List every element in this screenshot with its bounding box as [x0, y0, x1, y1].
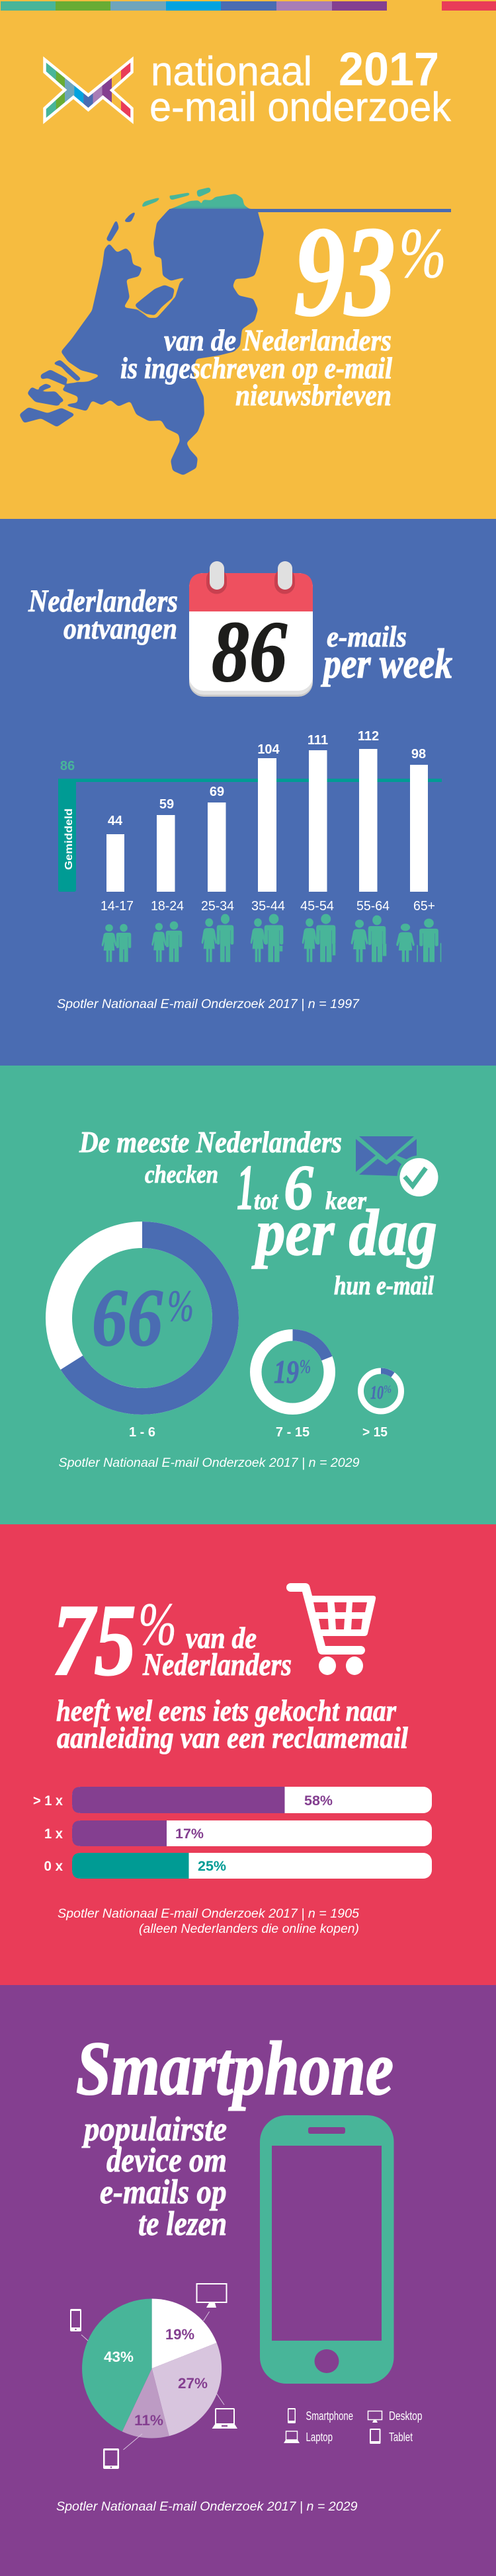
- title: [149, 44, 452, 130]
- donut chart: 66%: 66: [92, 1272, 163, 1363]
- text: subscribed to newsletters: [120, 323, 392, 412]
- pie chart: devices: 11%: [134, 2412, 163, 2429]
- icon: desktop: [197, 2284, 226, 2308]
- heading: tot: [254, 1187, 278, 1215]
- bar chart: purchases: > 1 x: [33, 1793, 63, 1809]
- source note: (alleen Nederlanders die online kopen): [139, 1922, 359, 1936]
- legend: Laptop: [306, 2431, 333, 2444]
- icon: large smartphone: [260, 2115, 394, 2384]
- icons: people by age group: [102, 914, 441, 962]
- legend: Smartphone: [306, 2409, 353, 2423]
- legend: Desktop: [389, 2409, 422, 2423]
- heading right: e-mails: [327, 621, 407, 653]
- bar chart: e-mails by age: Gemiddeld: [63, 808, 75, 870]
- text: subscribed to newsletters: van de Nederlanders: [164, 323, 392, 357]
- heading: aanleiding van een reclamemail: [57, 1721, 408, 1754]
- heading: Smartphone: [76, 2027, 393, 2111]
- donut chart: 10%: %: [384, 1383, 392, 1395]
- heading: 6: [284, 1152, 313, 1223]
- bar chart: e-mails by age: 18-24: [151, 899, 184, 914]
- bar chart: e-mails by age: 25-34: [201, 899, 234, 914]
- heading left: Nederlanders: [28, 584, 178, 619]
- icon: calendar with 86: [189, 561, 313, 700]
- text: subscribed to newsletters: is ingeschreven op e-mail: [120, 351, 392, 385]
- pie chart: devices: 27%: [178, 2375, 208, 2392]
- bar chart: e-mails by age: 35-44: [251, 899, 285, 914]
- source note: [58, 1907, 359, 1936]
- bar chart: e-mails by age: 69: [210, 785, 224, 799]
- colour strip: [1, 1, 496, 11]
- bar chart: purchases: 17%: [175, 1826, 204, 1842]
- bar chart: purchases: 0 x: [44, 1859, 63, 1874]
- bar chart: e-mails by age: 104: [257, 742, 280, 757]
- statistic: 93%: 93: [294, 200, 395, 343]
- bar chart: e-mails by age: 112: [358, 729, 379, 744]
- source note: Spotler Nationaal E-mail Onderzoek 2017 | n = 2029: [56, 2500, 358, 2514]
- bar chart: e-mails by age: 59: [159, 797, 174, 812]
- heading: De meeste Nederlanders: [79, 1125, 342, 1159]
- donut chart: 10%: 10: [370, 1382, 384, 1403]
- heading right: per week: [321, 640, 452, 687]
- text: most popular device: [81, 2111, 227, 2243]
- donut chart: 19%: [256, 1335, 329, 1440]
- heading: van de: [186, 1621, 257, 1655]
- icon: tablet: [103, 2448, 119, 2469]
- heading: hun e-mail: [334, 1270, 434, 1300]
- bar chart: e-mails by age: 111: [308, 733, 328, 748]
- source note: Spotler Nationaal E-mail Onderzoek 2017 | n = 2029: [58, 1456, 360, 1470]
- donut chart: 19%: 7 - 15: [276, 1425, 310, 1440]
- donut chart: 19%: %: [300, 1356, 311, 1378]
- panel: yellow intro: [0, 0, 496, 519]
- bar chart: purchases: [33, 1787, 432, 1879]
- title: 2017: [339, 44, 439, 96]
- icon: smartphone: [70, 2309, 81, 2331]
- icon: shopping cart: [291, 1588, 376, 1675]
- source note: Spotler Nationaal E-mail Onderzoek 2017 | n = 1997: [57, 997, 360, 1011]
- donut chart: 10%: [361, 1371, 401, 1440]
- heading left: [28, 584, 178, 645]
- bar chart: purchases: 58%: [304, 1793, 333, 1809]
- bar chart: e-mails by age: 45-54: [300, 899, 334, 914]
- panel: e-mails per week: [0, 519, 496, 1066]
- bar chart: e-mails by age: 55-64: [356, 899, 390, 914]
- heading: per dag: [251, 1196, 437, 1269]
- bar chart: purchases: 25%: [198, 1859, 226, 1874]
- bar chart: e-mails by age: [58, 729, 442, 914]
- bar chart: e-mails by age: 98: [411, 747, 426, 761]
- donut chart: 19%: 19: [274, 1353, 299, 1390]
- panel: purchases from e-mail: [0, 1524, 496, 1985]
- statistic: 75%: %: [138, 1590, 177, 1658]
- heading left: ontvangen: [63, 611, 177, 645]
- map of the Netherlands: [19, 187, 451, 475]
- panel: smartphone: [0, 1985, 496, 2576]
- text: most popular device: e-mails op: [100, 2173, 226, 2211]
- pie chart: devices: 19%: [165, 2326, 194, 2343]
- statistic: 75%: 75: [52, 1583, 136, 1697]
- pie chart: devices: 43%: [104, 2349, 134, 2365]
- bar chart: e-mails by age: 86: [60, 759, 75, 773]
- bar chart: e-mails by age: 65+: [413, 899, 435, 914]
- donut chart: 66%: 1 - 6: [129, 1425, 155, 1440]
- bar chart: e-mails by age: 44: [108, 814, 123, 828]
- statistic: 93%: %: [399, 214, 446, 293]
- donut chart: 66%: %: [167, 1280, 194, 1331]
- heading: heeft wel eens iets gekocht naar: [56, 1694, 397, 1727]
- pie chart: devices: [81, 2299, 224, 2450]
- heading: checken: [145, 1161, 218, 1189]
- heading right: [321, 621, 452, 687]
- donut chart: 66%: [59, 1235, 226, 1440]
- text: most popular device: device om: [106, 2142, 227, 2179]
- heading: [56, 1621, 408, 1754]
- bar chart: e-mails by age: 14-17: [101, 899, 134, 914]
- title: nationaal: [151, 49, 312, 95]
- donut chart: 10%: > 15: [362, 1425, 388, 1440]
- legend: Tablet: [389, 2431, 413, 2444]
- text: most popular device: populairste: [81, 2111, 227, 2148]
- legend: [284, 2408, 422, 2444]
- source note: Spotler Nationaal E-mail Onderzoek 2017 | n = 1905: [58, 1907, 359, 1921]
- title: e-mail onderzoek: [149, 85, 452, 130]
- icon: logo: [43, 53, 134, 127]
- bar chart: purchases: 1 x: [44, 1826, 63, 1842]
- icon: laptop: [212, 2409, 237, 2429]
- heading: [79, 1125, 437, 1300]
- heading: Nederlanders: [142, 1647, 292, 1682]
- icon: calendar with 86: 86: [212, 603, 287, 700]
- text: most popular device: te lezen: [138, 2205, 227, 2243]
- heading: 1: [237, 1152, 255, 1223]
- panel: checks per day: [0, 1066, 496, 1524]
- heading: keer: [325, 1187, 367, 1215]
- icon: envelope with check: [356, 1136, 440, 1199]
- text: subscribed to newsletters: nieuwsbrieven: [235, 378, 392, 412]
